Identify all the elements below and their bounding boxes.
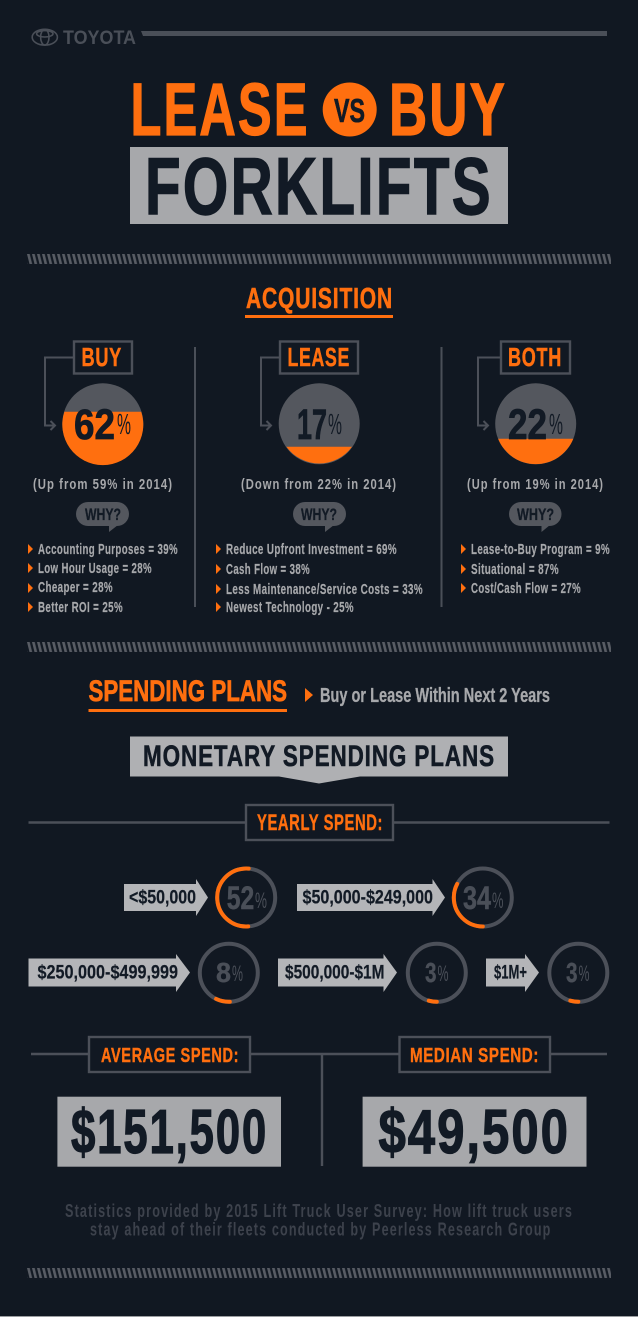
- ring: 52 percent: 52: [227, 880, 254, 916]
- reasons list: lease: Reduce Upfront Investment = 69%: [226, 542, 397, 558]
- stat: under 50,000: [124, 867, 277, 928]
- bubble: why: [293, 502, 346, 532]
- subheading: timeframe: [305, 685, 550, 707]
- bubble: why: [509, 502, 562, 532]
- pie: 62 percent: %: [117, 409, 131, 441]
- stat: 500,000 to 1M: [278, 944, 466, 1002]
- label: lease: LEASE: [288, 342, 350, 372]
- rule connecting average and median: [31, 1054, 607, 1166]
- divider stripes 1: [27, 254, 611, 264]
- reasons list: lease: Less Maintenance/Service Costs = 33%: [226, 582, 423, 598]
- pie: 62 percent: [62, 383, 143, 465]
- ring: 3 percent: 3: [566, 957, 578, 988]
- label: lease: [280, 342, 358, 374]
- badge: vs: VS: [334, 92, 365, 129]
- stat: 500,000 to 1M: $500,000-$1M: [285, 962, 384, 984]
- header bar: [141, 31, 607, 36]
- ring: 34 percent: [454, 868, 512, 926]
- stat: 50,000 to 249,000: $50,000-$249,000: [302, 888, 433, 908]
- panel: lease: [216, 342, 423, 616]
- value: average: $151,500: [71, 1098, 268, 1167]
- stat: under 50,000: <$50,000: [129, 888, 196, 908]
- reasons list: buy: Cheaper = 28%: [38, 580, 113, 596]
- panel: average spend: [57, 1037, 281, 1167]
- pie: 22 percent: [495, 383, 576, 464]
- stat: 1M plus: $1M+: [494, 962, 527, 984]
- ring: 3 percent: [408, 944, 466, 1002]
- heading: spending plans: [88, 675, 287, 712]
- heading: acquisition: [245, 283, 393, 318]
- heading: spending plans: SPENDING PLANS: [88, 675, 287, 708]
- heading: yearly spend: [28, 805, 610, 840]
- ring: 52 percent: %: [255, 888, 267, 913]
- label: both: BOTH: [508, 342, 562, 372]
- ring: 34 percent: %: [492, 888, 504, 913]
- connector arrow: buy: [45, 358, 73, 430]
- ring: 3 percent: 3: [425, 957, 436, 988]
- heading: median spend: MEDIAN SPEND:: [410, 1045, 539, 1067]
- reasons list: buy: [28, 542, 178, 616]
- title: [130, 68, 508, 232]
- ring: 3 percent: %: [578, 961, 590, 986]
- heading: average spend: [89, 1037, 250, 1072]
- header: Toyota logo and bar: [32, 28, 607, 49]
- stat: 250,000 to 499,999: $250,000-$499,999: [38, 962, 178, 984]
- ring: 8 percent: 8: [216, 957, 231, 988]
- reasons list: lease: Cash Flow = 38%: [226, 562, 310, 578]
- brand name: TOYOTA: [63, 28, 136, 49]
- reasons list: both: [461, 542, 610, 597]
- ring: 8 percent: [199, 943, 259, 1003]
- value: median: $49,500: [378, 1098, 570, 1167]
- divider stripes 3: [27, 1268, 611, 1278]
- reasons list: buy: Better ROI = 25%: [38, 600, 123, 616]
- heading: median spend: [400, 1037, 550, 1072]
- subheading: timeframe: Buy or Lease Within Next 2 Years: [320, 685, 550, 707]
- ring: 3 percent: [549, 944, 607, 1002]
- bubble: why: WHY?: [85, 505, 121, 524]
- icon: Toyota emblem: [32, 29, 57, 45]
- divider stripes 2: [27, 642, 611, 652]
- stat: 250,000 to 499,999: [28, 943, 259, 1003]
- column rule 1: [194, 347, 196, 607]
- ring: 8 percent: %: [232, 961, 243, 986]
- bubble: why: WHY?: [517, 505, 554, 524]
- pie: 22 percent: 22: [508, 401, 547, 449]
- reasons list: lease: [216, 542, 423, 616]
- pie: 17 percent: %: [328, 409, 342, 441]
- banner: monetary spending plans: MONETARY SPENDING PLANS: [143, 740, 495, 773]
- panel: buy: [28, 342, 178, 616]
- bubble: why: WHY?: [301, 505, 337, 524]
- banner: monetary spending plans: [130, 736, 508, 784]
- pie: 22 percent: %: [549, 409, 563, 441]
- label: both: [501, 342, 570, 374]
- connector arrow: both: [478, 358, 500, 430]
- panel: median spend: [363, 1037, 586, 1167]
- pie: 62 percent: 62: [74, 401, 115, 449]
- stat: 1M plus: [486, 944, 607, 1002]
- note: change from 2014: (Down from 22% in 2014): [241, 476, 397, 493]
- column rule 2: [440, 347, 442, 607]
- source note: [65, 1201, 573, 1240]
- ring: 3 percent: %: [438, 961, 448, 986]
- title banner: forklifts: FORKLIFTS: [145, 142, 493, 232]
- ring: 34 percent: 34: [463, 880, 491, 916]
- panel: both: [461, 342, 610, 597]
- note: change from 2014: (Up from 59% in 2014): [33, 476, 173, 493]
- bubble: why: [76, 502, 129, 532]
- stat: 50,000 to 249,000: [297, 868, 512, 926]
- badge: vs: [323, 82, 377, 136]
- title word: lease: LEASE: [130, 68, 310, 151]
- reasons list: both: Cost/Cash Flow = 27%: [471, 581, 581, 597]
- reasons list: both: Situational = 87%: [471, 562, 559, 578]
- reasons list: lease: Newest Technology - 25%: [226, 600, 354, 616]
- title word: buy: BUY: [389, 68, 507, 151]
- pie: 17 percent: [279, 383, 360, 464]
- label: buy: BUY: [82, 342, 122, 372]
- pie: 17 percent: 17: [297, 401, 327, 449]
- ring: 52 percent: [215, 867, 277, 928]
- heading: yearly spend: YEARLY SPEND:: [257, 810, 383, 835]
- connector arrow: lease: [261, 358, 279, 430]
- reasons list: buy: Low Hour Usage = 28%: [38, 561, 152, 577]
- heading: acquisition: ACQUISITION: [246, 283, 393, 315]
- reasons list: buy: Accounting Purposes = 39%: [38, 542, 178, 558]
- heading: average spend: AVERAGE SPEND:: [101, 1045, 239, 1067]
